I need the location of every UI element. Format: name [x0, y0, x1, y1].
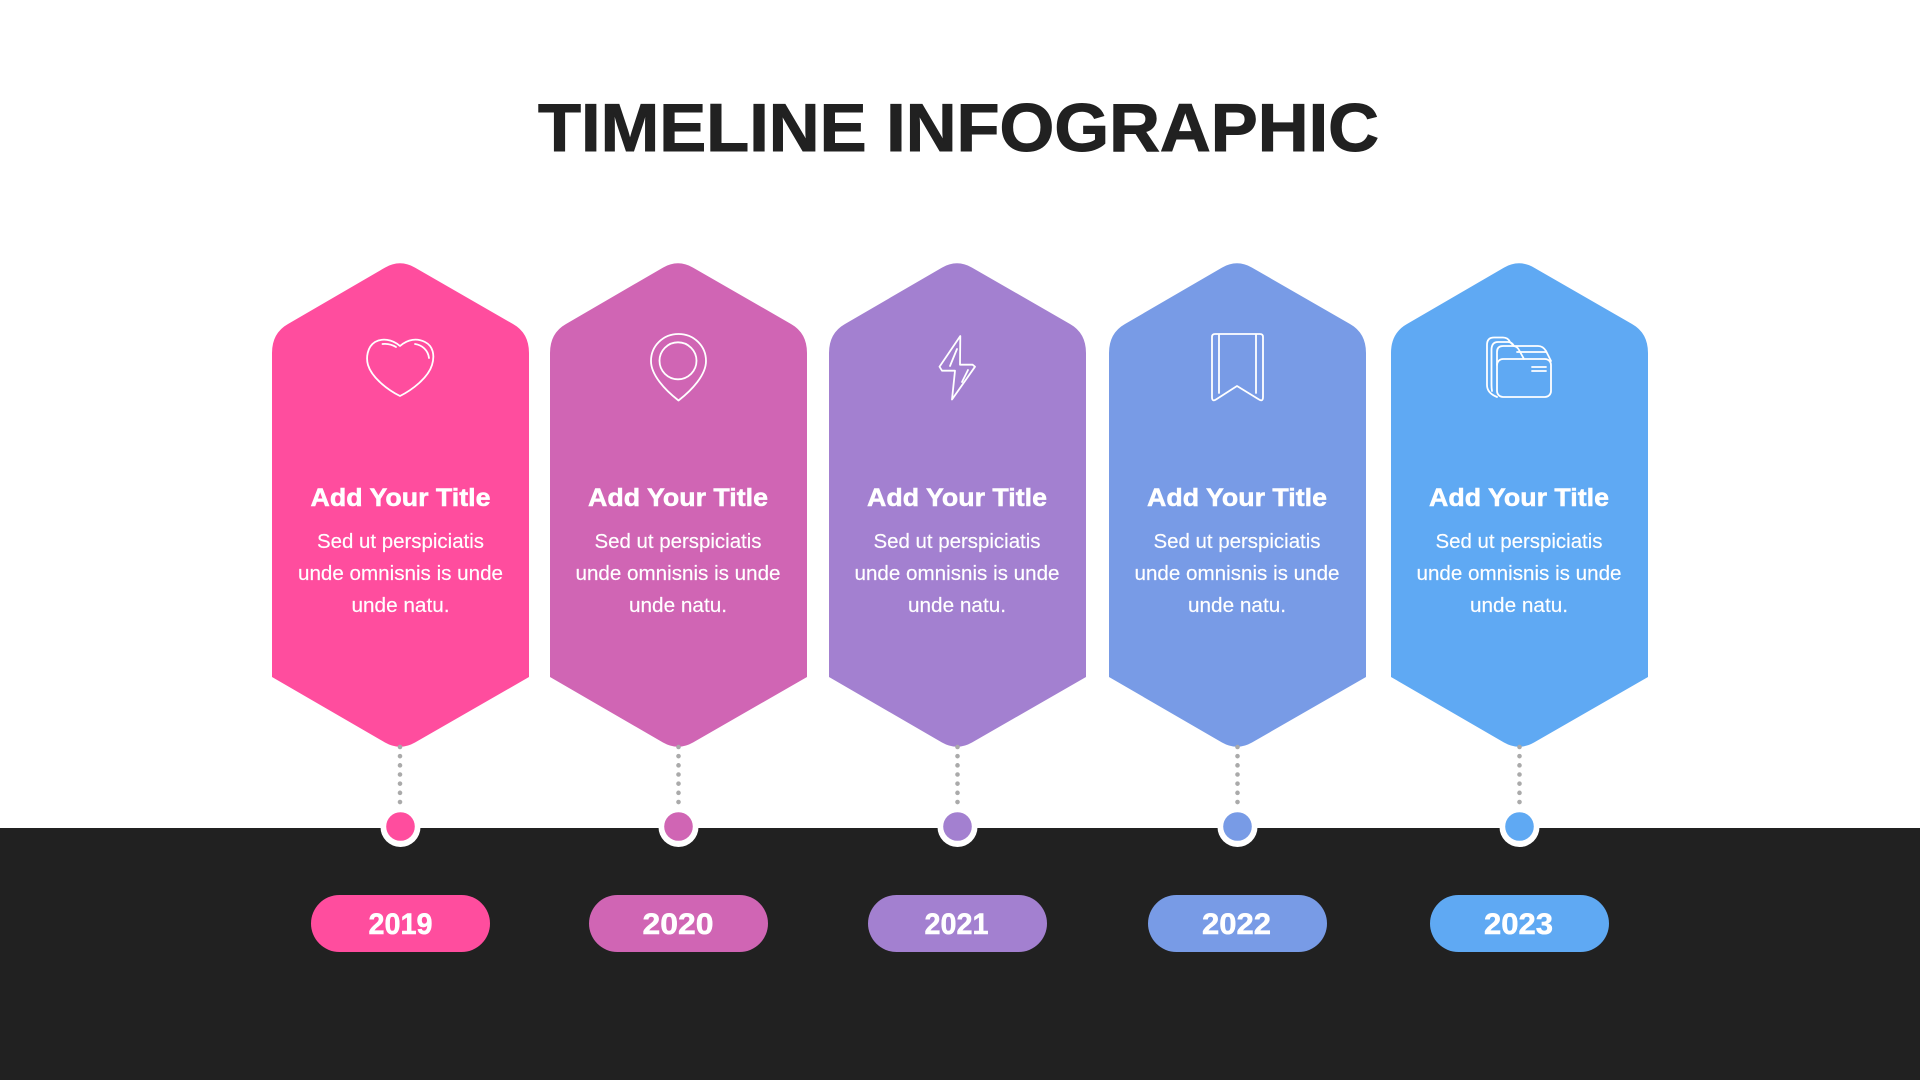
icon: location pin — [651, 334, 706, 400]
icon: lightning bolt — [940, 336, 975, 400]
marker 2023 — [1500, 807, 1540, 847]
body text 2021: Sed ut perspiciatis — [874, 531, 1040, 553]
panel: 2020 — [550, 263, 807, 952]
marker 2020 — [658, 807, 698, 847]
year pill 2021 — [868, 895, 1047, 952]
connector 2020 — [676, 747, 681, 806]
hexagon 2021 — [829, 263, 1086, 747]
body text 2023: Sed ut perspiciatis — [1436, 531, 1602, 553]
title: TIMELINE INFOGRAPHIC — [538, 90, 1379, 166]
body text 2023 — [1416, 531, 1622, 617]
body text 2022: unde natu. — [1188, 595, 1286, 617]
dark footer band — [0, 828, 1920, 1080]
hexagon 2019 — [272, 263, 529, 747]
year pill 2021: 2021 — [924, 908, 988, 941]
connector 2023 — [1517, 747, 1522, 806]
body text 2022: Sed ut perspiciatis — [1154, 531, 1320, 553]
heading 2022: Add Your Title — [1147, 484, 1327, 512]
body text 2019 — [298, 531, 503, 617]
body text 2019: unde omnisnis is unde — [298, 563, 503, 585]
body text 2019: unde natu. — [352, 595, 450, 617]
connector 2021 — [955, 747, 960, 806]
body text 2022 — [1134, 531, 1340, 617]
hexagon 2020 — [550, 263, 807, 747]
heading 2019: Add Your Title — [310, 484, 491, 512]
body text 2020: unde omnisnis is unde — [576, 563, 780, 585]
body text 2023: unde omnisnis is unde — [1416, 563, 1622, 585]
year pill 2019: 2019 — [368, 908, 432, 941]
heading 2021: Add Your Title — [867, 484, 1047, 512]
body text 2020: unde natu. — [629, 595, 727, 617]
marker 2022 — [1218, 807, 1258, 847]
icon: heart — [367, 340, 433, 396]
heading 2020: Add Your Title — [588, 484, 768, 512]
body text 2021: unde omnisnis is unde — [854, 563, 1060, 585]
body text 2023: unde natu. — [1470, 595, 1568, 617]
year pill 2020 — [589, 895, 768, 952]
panel: 2019 — [272, 263, 529, 952]
connector 2019 — [398, 747, 402, 806]
connector 2022 — [1235, 747, 1240, 806]
year pill 2023 — [1430, 895, 1609, 952]
heading 2023: Add Your Title — [1429, 484, 1609, 512]
icon: folders — [1487, 338, 1551, 397]
marker 2019 — [380, 807, 420, 847]
body text 2020 — [576, 531, 780, 617]
icon: bookmark — [1212, 334, 1263, 400]
panel: 2022 — [1109, 263, 1366, 952]
year pill 2023: 2023 — [1484, 908, 1553, 941]
year pill 2020: 2020 — [642, 908, 714, 941]
body text 2021 — [854, 531, 1060, 617]
body text 2019: Sed ut perspiciatis — [317, 531, 484, 553]
body text 2022: unde omnisnis is unde — [1134, 563, 1340, 585]
marker 2021 — [938, 807, 978, 847]
body text 2020: Sed ut perspiciatis — [594, 531, 762, 553]
body text 2021: unde natu. — [908, 595, 1006, 617]
panel: 2021 — [829, 263, 1086, 952]
year pill 2022 — [1148, 895, 1327, 952]
year pill 2022: 2022 — [1202, 908, 1271, 941]
hexagon 2022 — [1109, 263, 1366, 747]
panel: 2023 — [1391, 263, 1648, 952]
hexagon 2023 — [1391, 263, 1648, 747]
year pill 2019 — [311, 895, 490, 952]
